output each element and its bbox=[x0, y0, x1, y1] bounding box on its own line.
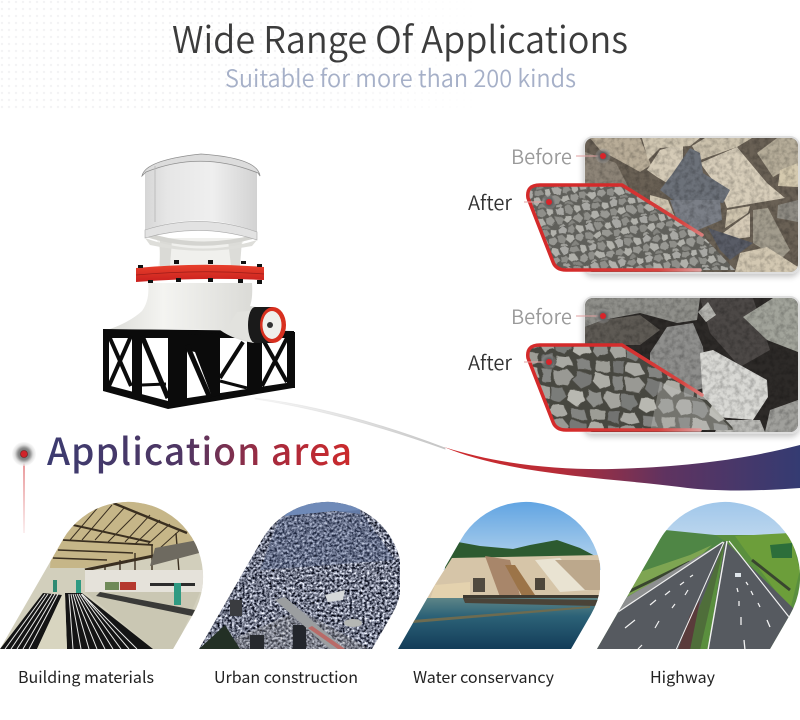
cone crusher machine bbox=[103, 154, 295, 409]
thin swoosh line bbox=[255, 398, 445, 449]
label: after: After bbox=[468, 187, 512, 216]
marker: after bbox=[524, 194, 556, 210]
label: Highway bbox=[650, 664, 716, 688]
machine base frame bbox=[103, 329, 295, 409]
machine drive wheel bbox=[248, 307, 286, 343]
machine upper drum bbox=[142, 154, 260, 251]
photo: aerial city bbox=[195, 498, 400, 653]
label: after: After bbox=[468, 347, 512, 376]
label: Building materials bbox=[18, 664, 154, 688]
title: Wide Range Of Applications bbox=[172, 10, 628, 64]
application: highway bbox=[590, 500, 800, 688]
after image bbox=[526, 183, 735, 272]
label: before: Before bbox=[511, 141, 572, 170]
photo: factory hall bbox=[0, 500, 210, 650]
machine red flange bbox=[136, 260, 264, 284]
subtitle: Suitable for more than 200 kinds bbox=[225, 59, 576, 94]
section heading: Application area: Application area bbox=[47, 422, 352, 476]
swoosh ribbon bbox=[444, 445, 800, 490]
machine neck bbox=[156, 238, 246, 268]
label: Water conservancy bbox=[413, 664, 555, 688]
label: before: Before bbox=[511, 301, 572, 330]
material sample: limestone bbox=[468, 138, 798, 275]
material sample: granite bbox=[468, 298, 798, 435]
before image bbox=[585, 298, 798, 432]
photo: dam and reservoir bbox=[395, 500, 605, 650]
background: halftone dots bbox=[0, 0, 480, 112]
marker: after bbox=[524, 354, 556, 370]
application: water conservancy bbox=[395, 500, 605, 688]
application: building materials bbox=[0, 500, 210, 688]
photo: divided highway bbox=[590, 500, 800, 650]
marker: before bbox=[576, 148, 610, 164]
before image bbox=[585, 138, 798, 272]
application: urban construction bbox=[195, 498, 400, 688]
after image bbox=[526, 343, 735, 432]
label: Urban construction bbox=[214, 664, 358, 688]
section marker: dot and line bbox=[12, 442, 36, 533]
marker: before bbox=[576, 308, 610, 324]
machine lower body bbox=[110, 283, 262, 343]
